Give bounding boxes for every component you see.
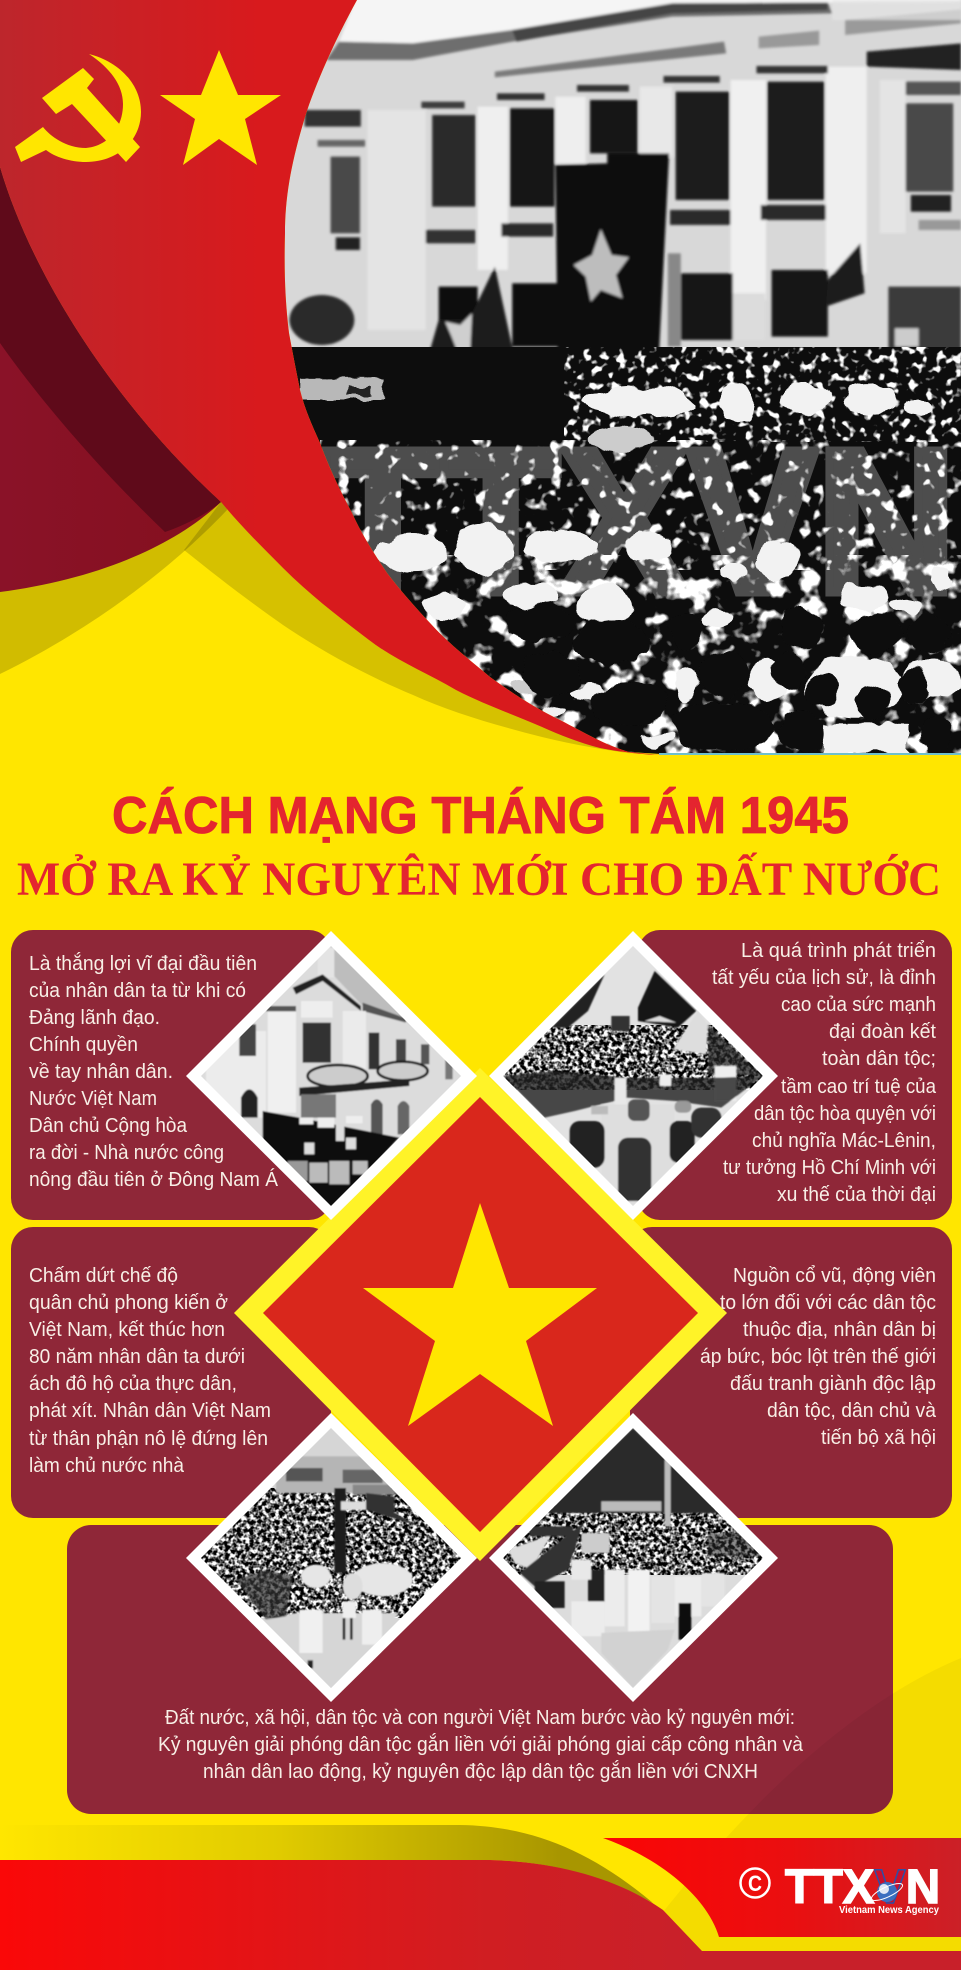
panel: top right — [638, 930, 952, 1220]
text: middle left: Việt Nam, kết thúc hơn — [29, 1318, 225, 1341]
text: top left: Dân chủ Cộng hòa — [29, 1114, 188, 1137]
diamond photo: bottom left, crowd — [186, 1413, 477, 1702]
logo: Vietnam News Agency: Vietnam News Agency — [839, 1904, 939, 1916]
text: top right: tư tưởng Hồ Chí Minh với — [723, 1156, 936, 1179]
text: top right: dân tộc hòa quyện với — [754, 1102, 936, 1125]
text: middle right: to lớn đối với các dân tộc — [720, 1291, 936, 1314]
logo: copyright mark: C — [748, 1871, 762, 1896]
text: middle right: thuộc địa, nhân dân bị — [743, 1318, 936, 1341]
panel: middle left — [11, 1227, 331, 1518]
translucent curved bands — [0, 480, 635, 754]
text: top right: chủ nghĩa Mác-Lênin, — [752, 1129, 936, 1152]
text: top left: Là thắng lợi vĩ đại đầu tiên — [29, 952, 257, 975]
text: top right: tất yếu của lịch sử, là đỉnh — [712, 966, 936, 989]
text: top right: tầm cao trí tuệ của — [781, 1075, 937, 1098]
text: middle left: từ thân phận nô lệ đứng lên — [29, 1427, 268, 1450]
logo: TTXVN: TTXVN — [785, 1861, 940, 1914]
text: top left: về tay nhân dân. — [29, 1060, 173, 1083]
footer olive ribbon — [0, 1825, 653, 1903]
title line 1: CÁCH MẠNG THÁNG TÁM 1945 — [112, 787, 849, 845]
panel: middle right — [630, 1227, 952, 1518]
text: middle right: áp bức, bóc lột trên thế giới — [700, 1345, 936, 1368]
lower right translucent sweep — [663, 1658, 961, 1951]
text: top left: Nước Việt Nam — [29, 1087, 157, 1110]
title line 2: MỞ RA KỶ NGUYÊN MỚI CHO ĐẤT NƯỚC — [17, 851, 941, 906]
text: middle left — [29, 1264, 271, 1477]
diamond photo: top left, opera house — [186, 931, 477, 1220]
logo: copyright mark — [740, 1868, 770, 1898]
text: top right: cao của sức mạnh — [781, 993, 936, 1016]
icon: hammer and sickle — [15, 54, 141, 162]
text: middle right: Nguồn cổ vũ, động viên — [733, 1264, 936, 1287]
text: top left: Đảng lãnh đạo. — [29, 1006, 160, 1029]
text: top left: ra đời - Nhà nước công — [29, 1141, 224, 1164]
text: bottom — [158, 1706, 804, 1783]
text: middle left: làm chủ nước nhà — [29, 1454, 185, 1477]
flag on the left with star — [428, 266, 514, 347]
text: middle left: 80 năm nhân dân ta dưới — [29, 1345, 245, 1368]
text: middle left: quân chủ phong kiến ở — [29, 1291, 228, 1314]
text: top right: đại đoàn kết — [829, 1020, 936, 1043]
dark maroon band — [0, 167, 221, 532]
large flag with star — [555, 153, 669, 350]
panel: top left — [11, 930, 331, 1220]
text: bottom: Đất nước, xã hội, dân tộc và con người Việt Nam bước vào kỷ nguyên mới: — [165, 1706, 795, 1729]
text: middle left: ách đô hộ của thực dân, — [29, 1372, 237, 1395]
text: middle left: phát xít. Nhân dân Việt Nam — [29, 1399, 271, 1422]
text: middle right: đấu tranh giành độc lập — [730, 1372, 936, 1395]
text: top left: của nhân dân ta từ khi có — [29, 979, 246, 1002]
diamond photo: top right, marching crowd — [489, 931, 778, 1220]
text: middle right — [700, 1264, 937, 1449]
header photograph: crowd before the Hanoi Opera House — [283, 0, 961, 755]
red header sweep — [0, 0, 661, 755]
text: bottom: Kỷ nguyên giải phóng dân tộc gắn liền với giải phóng giai cấp công nhân và — [158, 1733, 804, 1756]
text: top right: Là quá trình phát triển — [741, 939, 936, 962]
diamond photo: bottom right, marchers — [489, 1413, 778, 1702]
maroon curved shape — [0, 167, 221, 592]
text: middle left: Chấm dứt chế độ — [29, 1264, 178, 1287]
text: top left — [29, 952, 278, 1191]
footer red band — [0, 1860, 961, 1970]
central diamond with star — [234, 1068, 727, 1561]
panel: bottom — [67, 1525, 893, 1814]
text: top right: xu thế của thời đại — [777, 1183, 936, 1206]
text: top left: Chính quyền — [29, 1033, 138, 1056]
crowd — [283, 347, 961, 755]
text: top right — [712, 939, 937, 1206]
text: bottom: nhân dân lao động, kỷ nguyên độc lập dân tộc gắn liền với CNXH — [203, 1760, 758, 1783]
text: top right: toàn dân tộc; — [822, 1047, 936, 1070]
text: middle right: tiến bộ xã hội — [821, 1426, 936, 1449]
text: top left: nông đầu tiên ở Đông Nam Á — [29, 1168, 278, 1191]
icon: yellow star — [160, 50, 281, 165]
footer red logo panel — [603, 1838, 961, 1937]
text: middle right: dân tộc, dân chủ và — [767, 1399, 937, 1422]
